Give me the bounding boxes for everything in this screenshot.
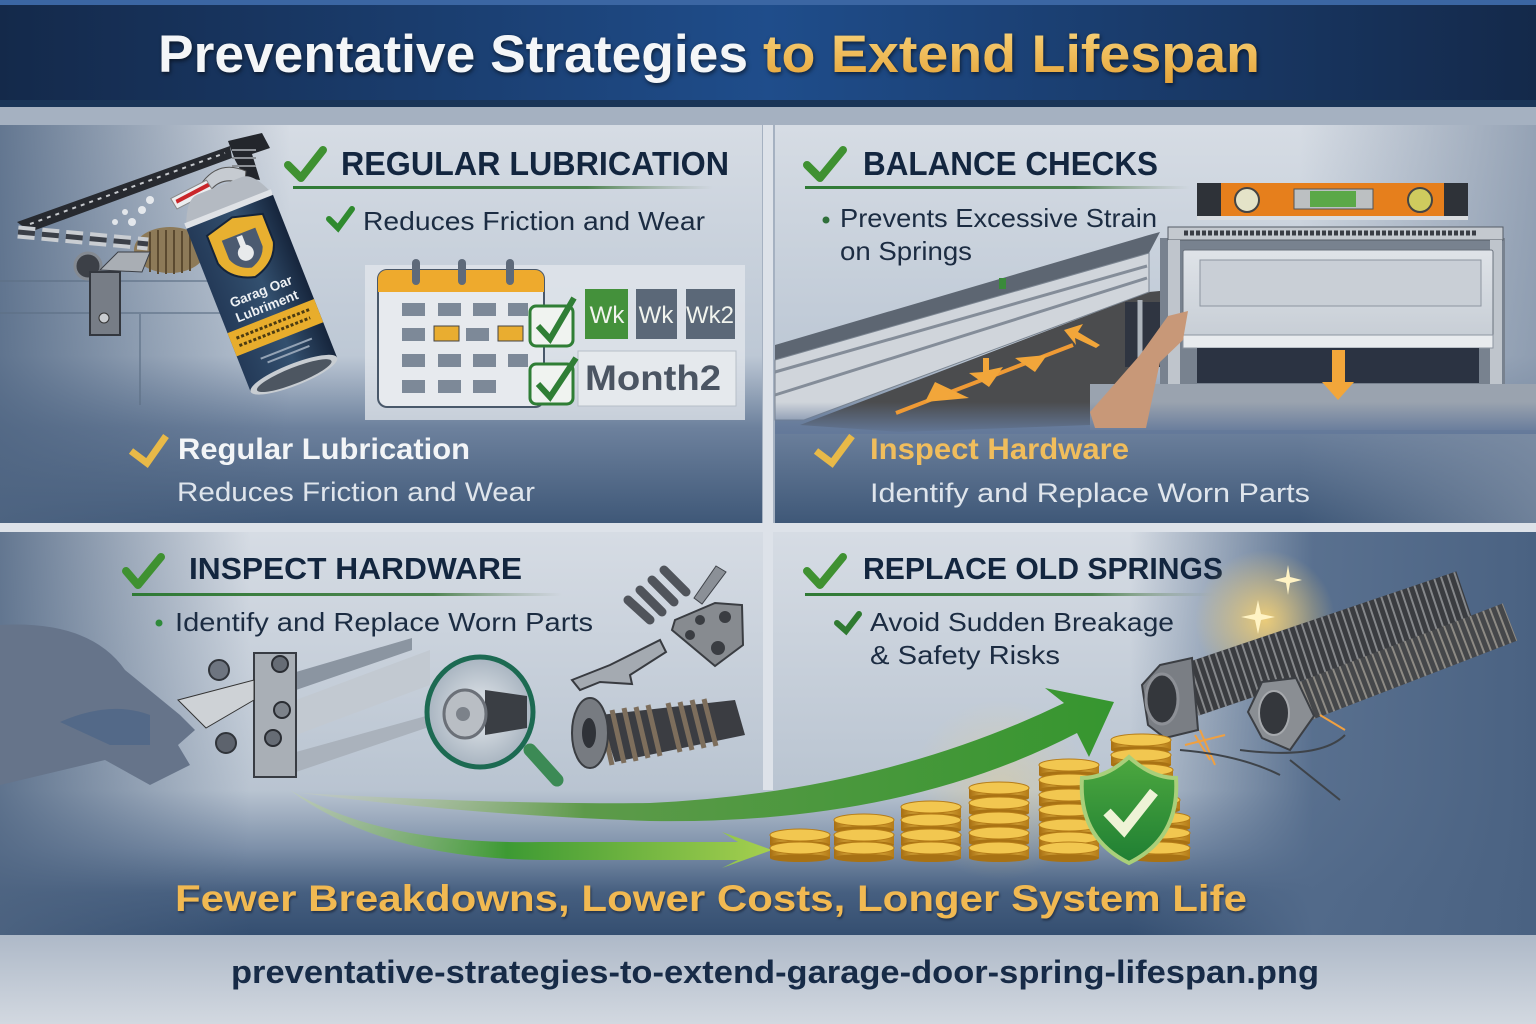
icon: sparkle glow <box>1195 550 1335 690</box>
icon: worn parts <box>572 566 745 768</box>
text: avoid sudden breakage: & Safety Risks <box>870 640 1060 670</box>
text: gold check summary: Reduces Friction and Wear <box>177 477 535 507</box>
bottom band <box>0 790 1536 936</box>
panel: replace old springs <box>773 532 1536 936</box>
icon: green shield with check <box>1082 757 1176 863</box>
text: inspect hardware summary: Identify and Replace Worn Parts <box>870 478 1310 508</box>
icon: spirit level <box>1197 183 1468 220</box>
text: prevents strain: Prevents Excessive Strain <box>840 203 1157 233</box>
heading: inspect hardware: INSPECT HARDWARE <box>189 551 522 586</box>
heading: replace old springs: REPLACE OLD SPRINGS <box>863 551 1223 586</box>
panel: regular lubrication <box>0 125 762 523</box>
icon: hand on door <box>1090 311 1188 428</box>
illustration: gloved hand and bracket <box>0 625 430 785</box>
panel: balance checks <box>775 125 1536 523</box>
text: prevents strain: on Springs <box>840 236 972 266</box>
text: identify worn parts: Identify and Replace Worn Parts <box>175 607 593 637</box>
tagline: Fewer Breakdowns, Lower Costs, Longer System Life <box>175 878 1247 919</box>
heading: inspect hardware <box>126 551 562 596</box>
panel: inspect hardware <box>0 532 763 936</box>
icon: torsion springs <box>1142 597 1510 800</box>
text: inspect hardware summary <box>816 433 1310 508</box>
heading: regular lubrication: REGULAR LUBRICATION <box>341 145 729 182</box>
gutters between panels <box>0 125 1536 790</box>
footer bar <box>0 935 1536 1024</box>
file name: preventative-strategies-to-extend-garage-door-spring-lifespan.png <box>231 954 1319 990</box>
header banner <box>0 0 1536 107</box>
title: to Extend Lifespan <box>763 25 1260 84</box>
calendar schedule: Month2 <box>585 359 721 398</box>
heading: replace old springs <box>805 551 1223 596</box>
icon: lubricant spray can <box>167 154 341 403</box>
calendar schedule: Wk2 <box>686 302 734 329</box>
worn coil <box>628 570 686 620</box>
title: Preventative Strategies <box>158 25 748 84</box>
icon: magnifying glass <box>427 657 557 780</box>
chart: growing coin stacks <box>770 734 1190 862</box>
icon: orange force arrows <box>896 324 1354 413</box>
text: avoid sudden breakage: Avoid Sudden Breakage <box>870 607 1174 637</box>
text: gold check summary: Regular Lubrication <box>178 433 470 466</box>
icon: lubricant spray can: Garag Oar <box>228 272 295 310</box>
chart: rising green arrows <box>290 688 1114 880</box>
text: prevents strain <box>822 203 1157 266</box>
calendar schedule: Wk <box>590 302 625 329</box>
text: gold check summary <box>131 433 535 507</box>
illustration: tilted door and floor <box>775 227 1536 434</box>
text: avoid sudden breakage <box>837 607 1174 670</box>
heading: balance checks <box>805 145 1190 189</box>
icon: lubricant spray can: Lubriment <box>233 287 301 325</box>
icon: chain drive <box>17 133 270 335</box>
text: inspect hardware summary: Inspect Hardware <box>870 433 1129 466</box>
calendar schedule: Wk <box>639 302 674 329</box>
text: reduces friction: Reduces Friction and Wear <box>363 206 705 236</box>
calendar schedule <box>365 259 745 420</box>
heading: balance checks: BALANCE CHECKS <box>863 145 1158 182</box>
